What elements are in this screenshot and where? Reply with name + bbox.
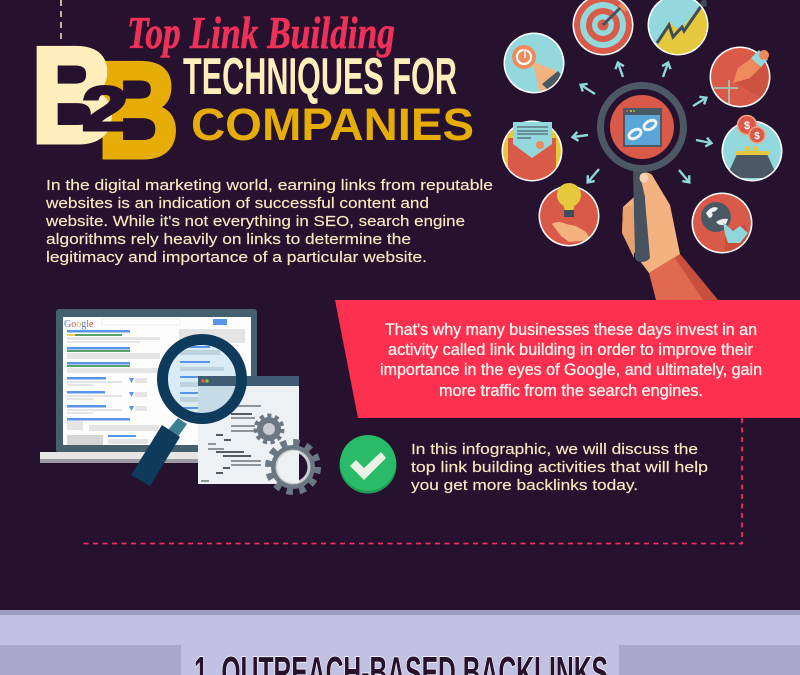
B2B logotype: 2 xyxy=(82,75,128,144)
intro text: In the digital marketing world, earning links from reputable xyxy=(46,177,493,194)
intro text: algorithms rely heavily on links to determine the xyxy=(46,231,411,248)
arrows xyxy=(573,63,711,182)
magnifying glass xyxy=(131,340,242,486)
B2B logotype: B xyxy=(97,34,179,186)
dashed connector top xyxy=(60,0,62,40)
heading line: techniques for: TECHNIQUES FOR xyxy=(183,48,457,106)
icon: lightbulb hand xyxy=(538,183,600,246)
callout banner: activity called link building in order to improve their xyxy=(388,340,753,359)
callout banner: importance in the eyes of Google, and ultimately, gain xyxy=(380,360,762,379)
script heading: Top Link Building xyxy=(127,8,395,58)
illustration: laptop search results xyxy=(40,309,318,492)
B2B logotype xyxy=(31,19,179,186)
icon: envelope xyxy=(502,120,562,182)
icon: growth chart xyxy=(648,0,708,56)
B2B logotype: B xyxy=(31,19,115,171)
closing text: you get more backlinks today. xyxy=(411,477,638,494)
illustration: magnifier with icons xyxy=(502,0,782,300)
intro text: legitimacy and importance of a particular website. xyxy=(46,249,427,266)
icon: pencil xyxy=(710,46,770,108)
title block xyxy=(31,8,474,186)
icon: green check xyxy=(340,435,396,494)
closing text xyxy=(411,441,708,494)
closing text: top link building activities that will help xyxy=(411,459,708,476)
heading line: companies: COMPANIES xyxy=(191,99,474,150)
intro text: websites is an indication of successful content and xyxy=(45,195,429,212)
callout banner: That's why many businesses these days invest in an xyxy=(385,320,757,339)
closing text: In this infographic, we will discuss the xyxy=(411,441,698,458)
icon: coin purse xyxy=(722,116,782,182)
icon: coin purse: $ xyxy=(744,120,750,132)
dashed connector xyxy=(82,418,742,544)
laptop: Google xyxy=(64,319,94,330)
intro text xyxy=(45,177,493,266)
code window with gears xyxy=(198,376,318,492)
hand and magnifier xyxy=(600,86,684,273)
intro text: website. While it's not everything in SEO, search engine xyxy=(45,213,465,230)
sleeve xyxy=(649,254,718,300)
icon: power button hand xyxy=(504,32,565,95)
laptop xyxy=(40,309,257,463)
icon: globe click xyxy=(692,192,755,255)
callout banner xyxy=(335,300,800,418)
icon: coin purse: $ xyxy=(754,131,760,142)
icon: target xyxy=(572,0,638,56)
section 1 band xyxy=(0,610,800,675)
callout banner: more traffic from the search engines. xyxy=(439,381,703,400)
